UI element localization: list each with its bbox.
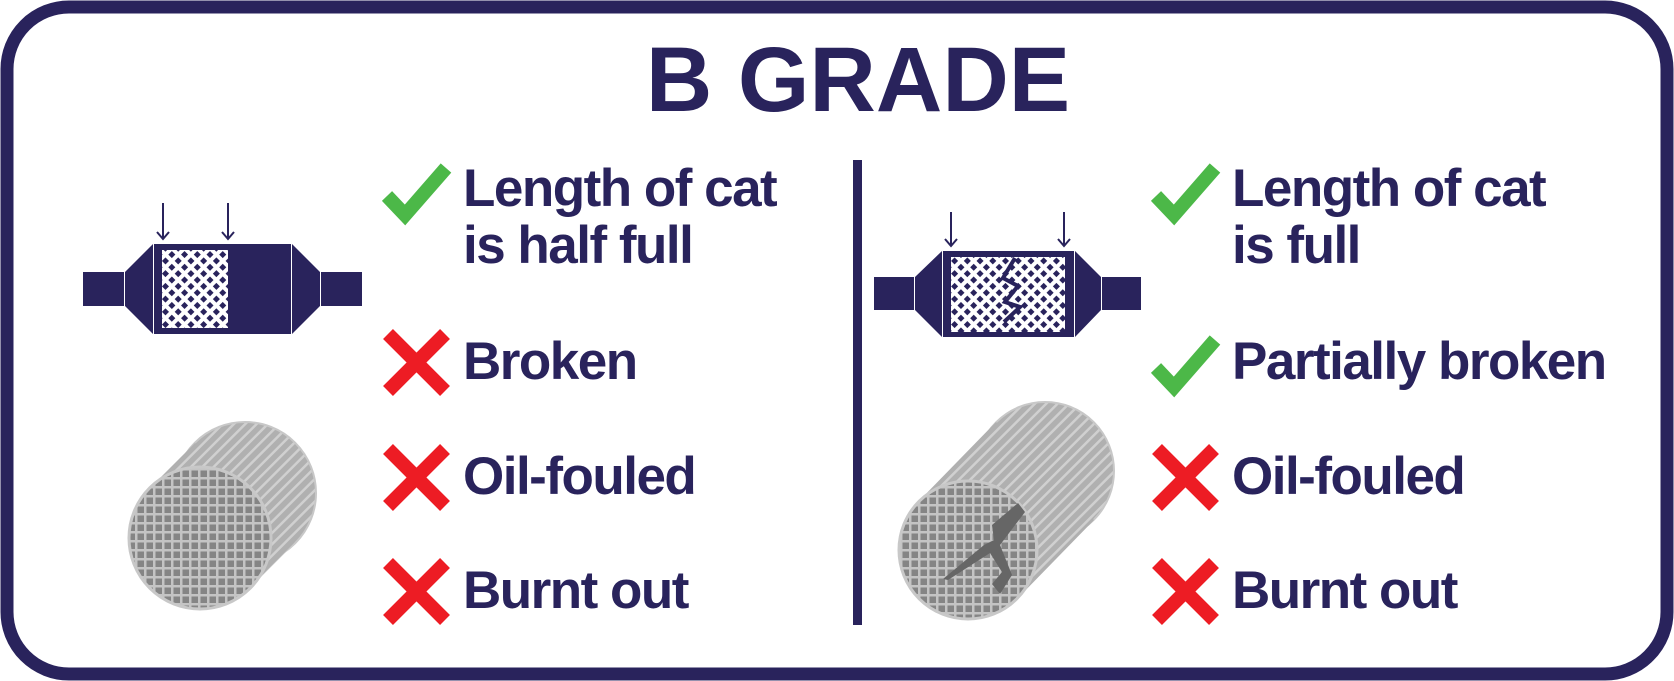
icon: cylinder right cracked	[899, 402, 1114, 619]
text: length half full: Length of cat	[463, 159, 777, 218]
icon: check	[387, 168, 446, 215]
text: broken: Broken	[463, 332, 637, 391]
left list	[387, 159, 777, 620]
divider	[853, 160, 862, 625]
text: oil-fouled: Oil-fouled	[463, 447, 695, 506]
right list: is full	[1232, 216, 1360, 275]
icon: cylinder left	[129, 422, 316, 609]
right list	[1156, 159, 1606, 620]
text: length full: Length of cat	[1232, 159, 1546, 218]
icon: x burnt right	[1157, 563, 1214, 620]
icon: x broken	[388, 334, 445, 391]
left list: is half full	[463, 216, 692, 275]
icon: x burnt	[388, 563, 445, 620]
text: oil-fouled right: Oil-fouled	[1232, 447, 1464, 506]
title: B GRADE	[646, 29, 1070, 131]
text: partially broken: Partially broken	[1232, 332, 1606, 391]
icon: converter half full	[83, 203, 362, 334]
icon: check partial	[1156, 340, 1215, 387]
icon: x oil	[388, 449, 445, 506]
icon: check full	[1156, 168, 1215, 215]
text: burnt out right: Burnt out	[1232, 561, 1458, 620]
text: burnt out: Burnt out	[463, 561, 689, 620]
icon: converter full broken	[874, 212, 1141, 337]
icon: x oil right	[1157, 449, 1214, 506]
